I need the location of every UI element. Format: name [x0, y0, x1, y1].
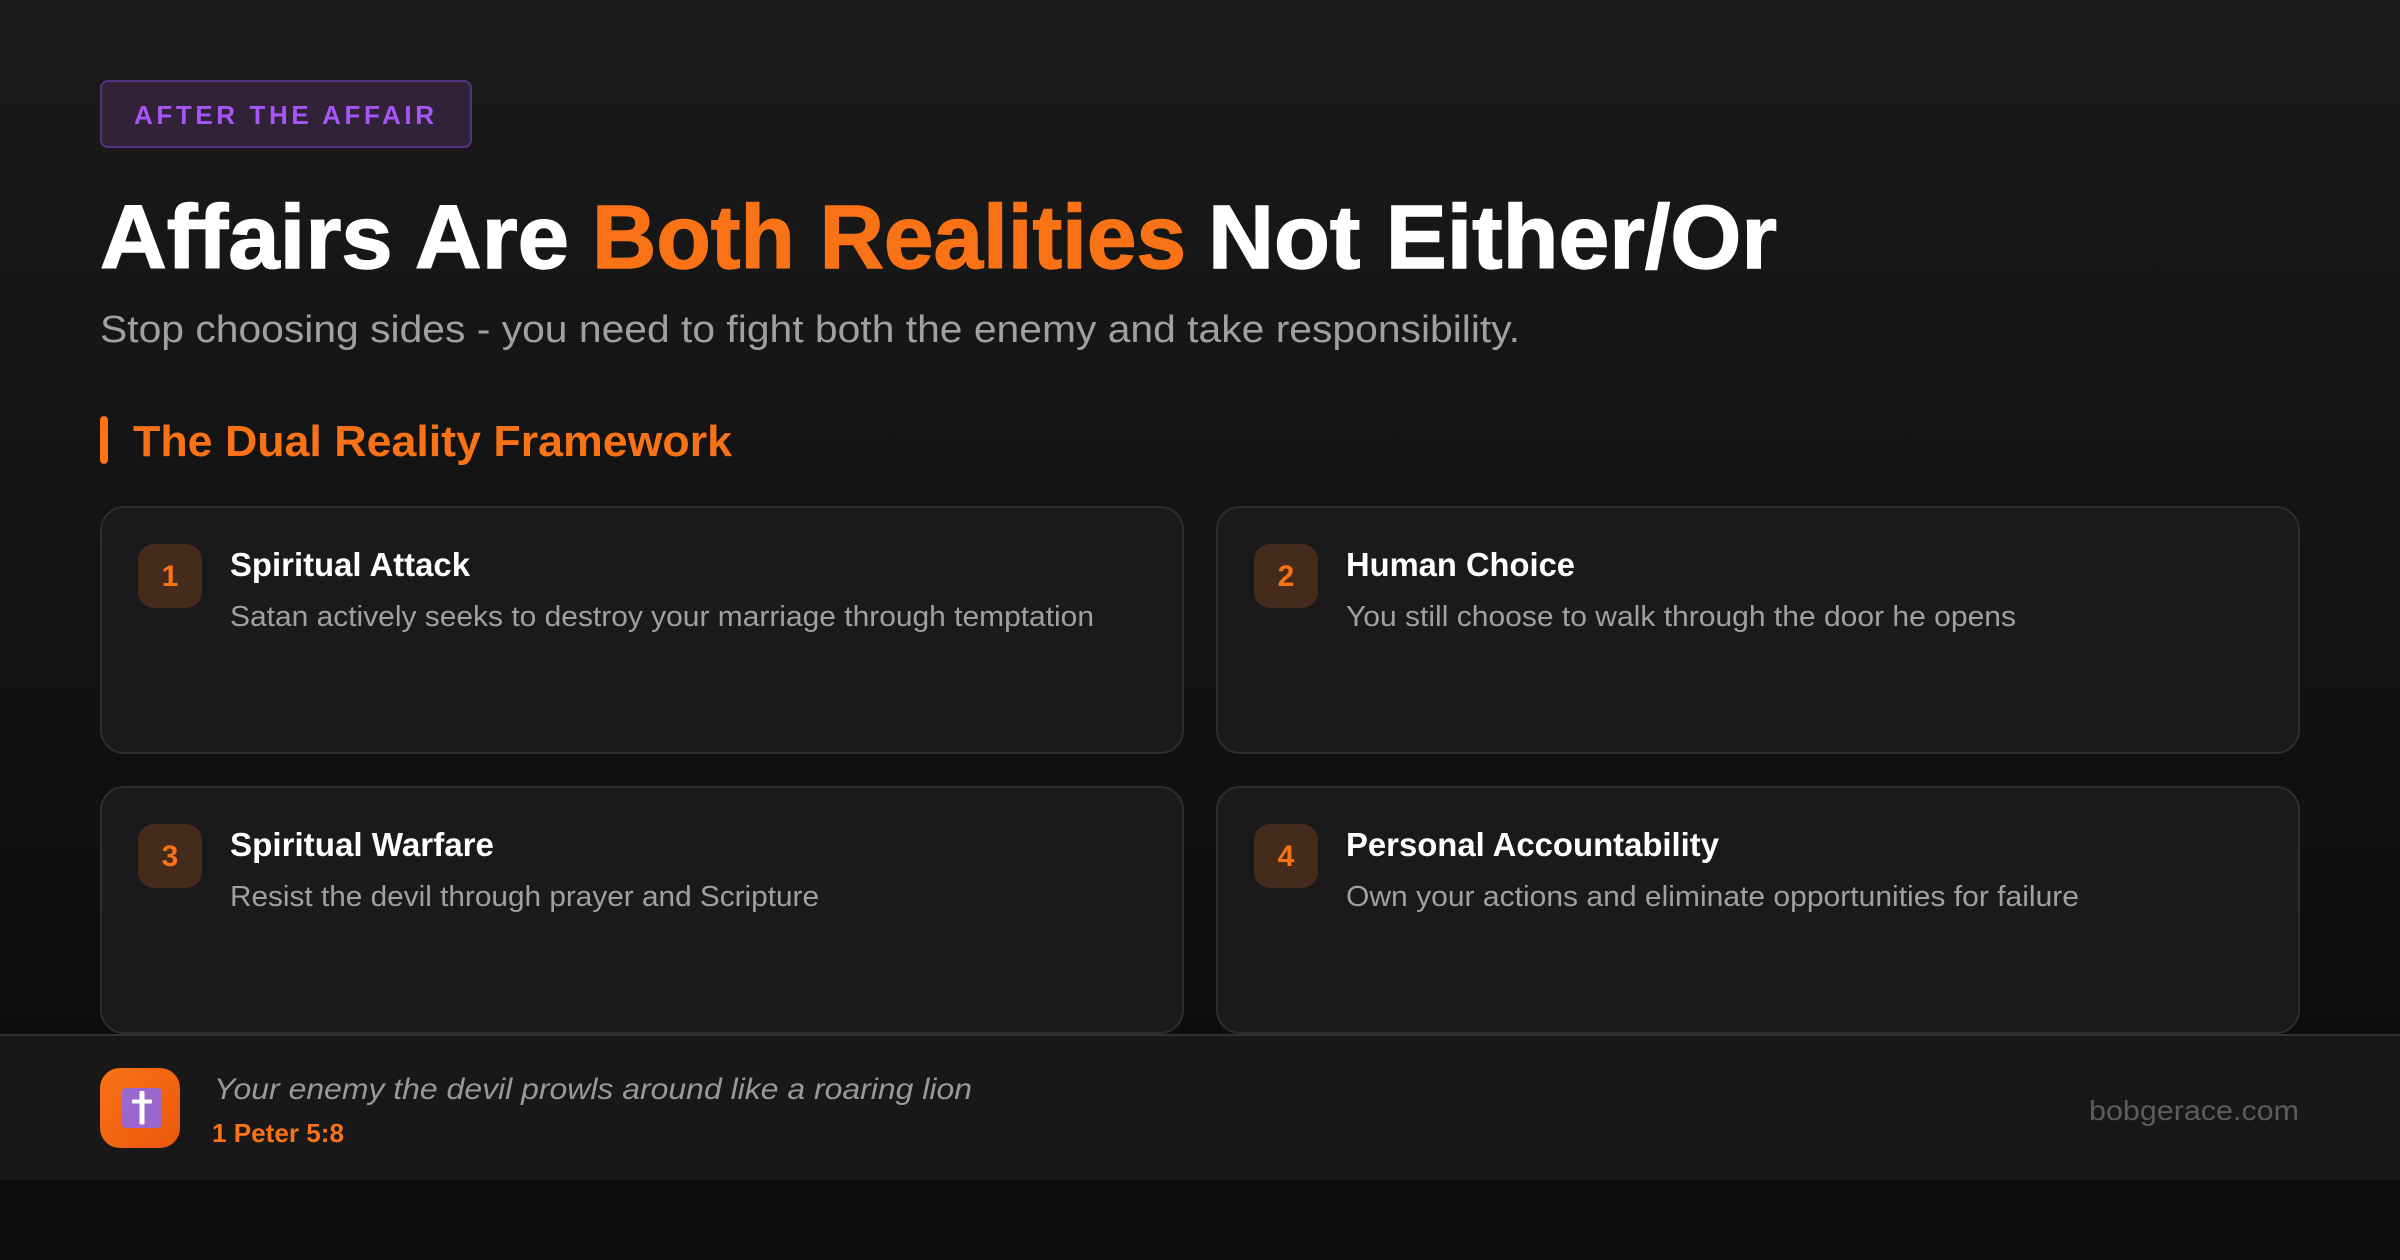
number 4: [1254, 824, 1318, 888]
title: Both Realities: [592, 188, 1186, 288]
card description: Own your actions and eliminate opportunities for failure: [1346, 881, 2079, 913]
card title: Personal Accountability: [1346, 826, 1720, 863]
number 4: 4: [1278, 840, 1295, 873]
number 1: [138, 544, 202, 608]
card 2: human choice: [1217, 507, 2299, 753]
title: Not Either/Or: [1208, 188, 1777, 288]
section heading: The Dual Reality Framework: [133, 417, 733, 466]
card description: You still choose to walk through the door he opens: [1346, 601, 2016, 633]
card title: Spiritual Attack: [230, 546, 471, 583]
subtitle: Stop choosing sides - you need to fight both the enemy and take responsibility.: [100, 309, 1520, 351]
card description: Satan actively seeks to destroy your marriage through temptation: [230, 601, 1094, 633]
card 3: spiritual warfare: [101, 787, 1183, 1033]
number 1: 1: [162, 560, 178, 593]
number 2: [1254, 544, 1318, 608]
title: Affairs Are: [100, 188, 569, 288]
number 3: [138, 824, 202, 888]
icon: cross: [100, 1068, 180, 1148]
badge: after the affair: [101, 81, 471, 147]
footer bar: [0, 1034, 2400, 1180]
number 2: 2: [1278, 560, 1294, 593]
scripture quote: Your enemy the devil prowls around like a roaring lion: [214, 1073, 972, 1106]
badge: after the affair: AFTER THE AFFAIR: [134, 100, 434, 130]
number 3: 3: [162, 840, 178, 873]
card title: Spiritual Warfare: [230, 826, 494, 863]
card 4: personal accountability: [1217, 787, 2299, 1033]
card description: Resist the devil through prayer and Scripture: [230, 881, 819, 913]
title: [100, 188, 1777, 288]
scripture reference: 1 Peter 5:8: [212, 1118, 344, 1148]
website: bobgerace.com: [2089, 1095, 2299, 1126]
card 1: spiritual attack: [101, 507, 1183, 753]
card title: Human Choice: [1346, 546, 1575, 583]
